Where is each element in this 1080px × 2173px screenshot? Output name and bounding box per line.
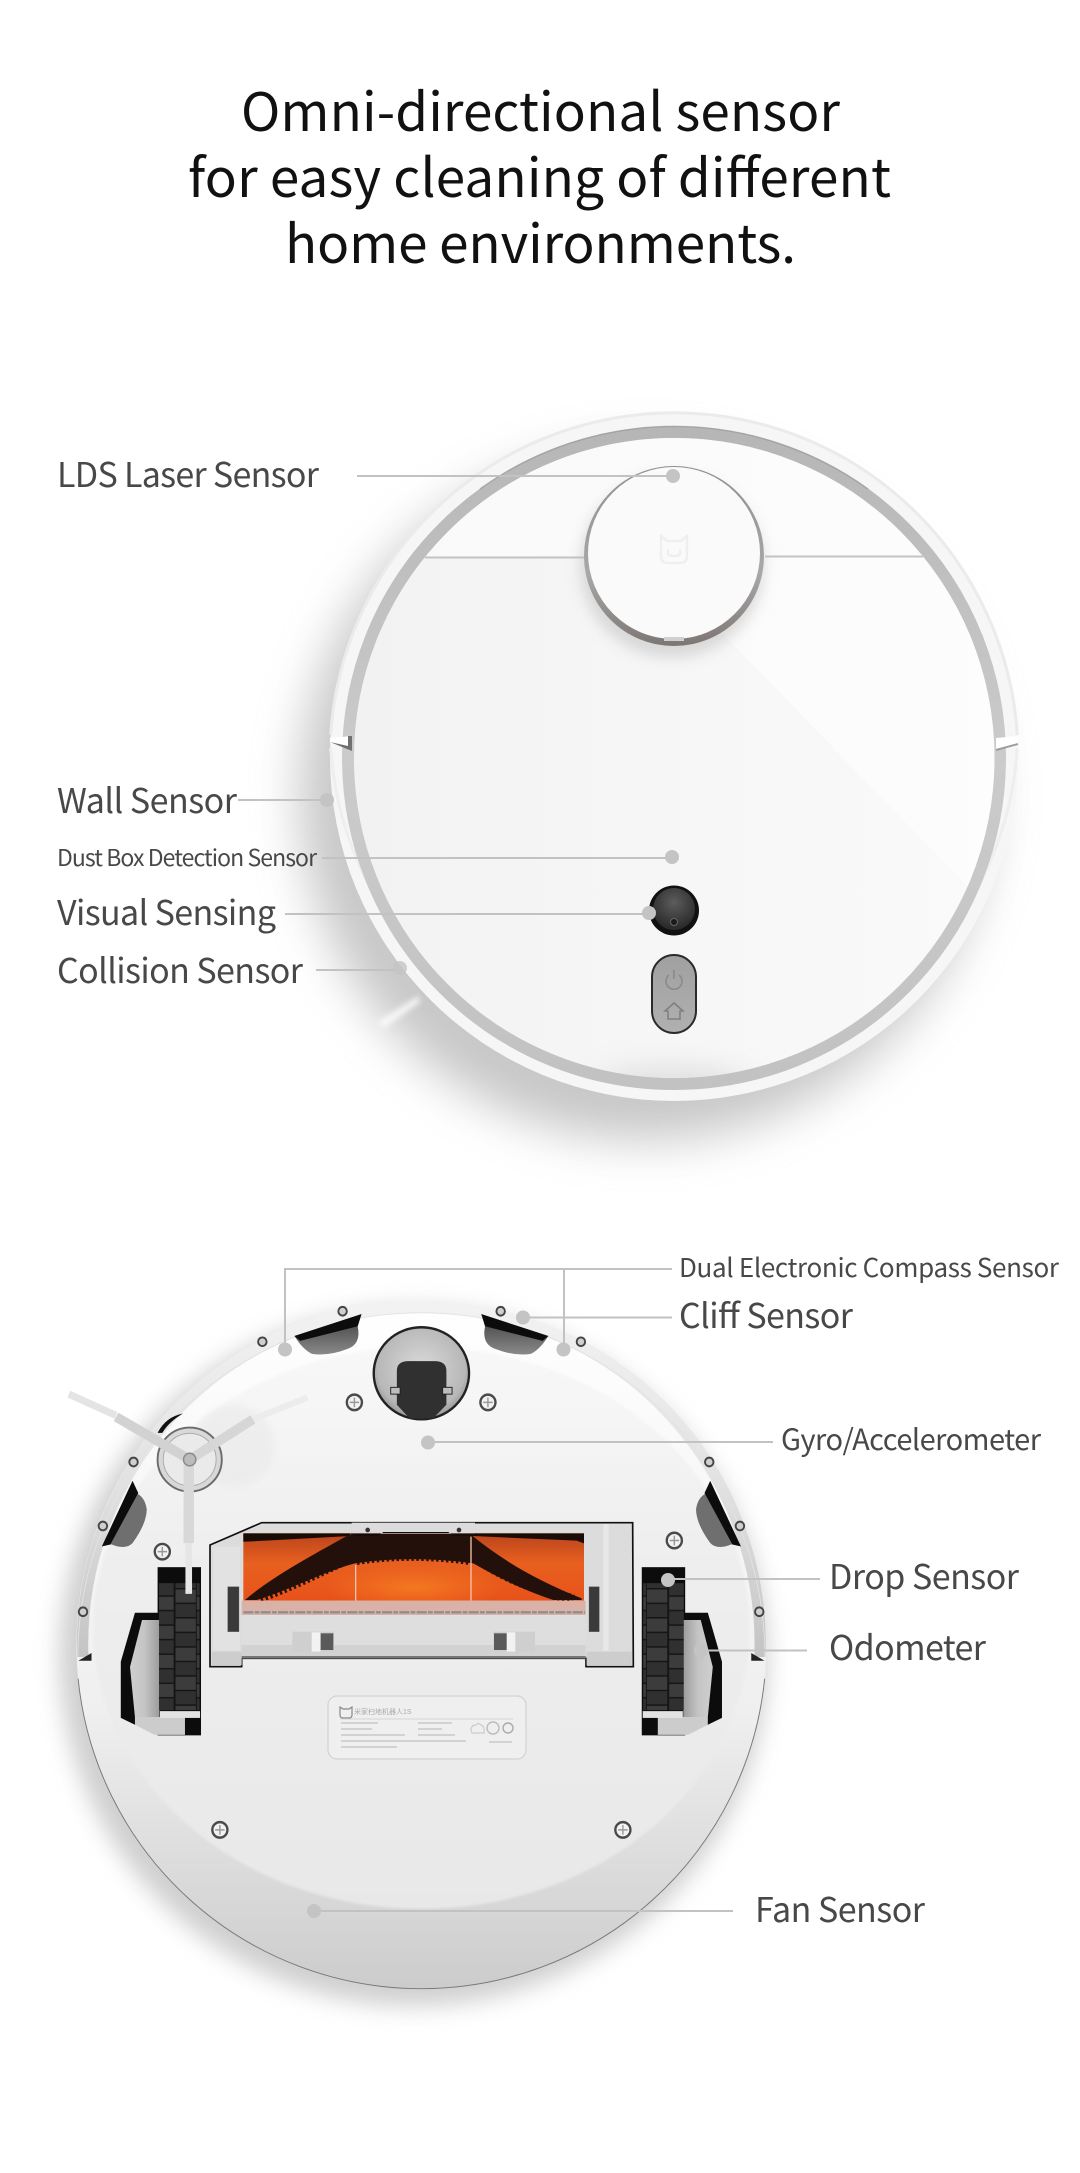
notches	[330, 736, 1018, 751]
callout: Cliff Sensor	[516, 1289, 854, 1338]
base disc	[76, 1301, 766, 1989]
power and home buttons	[652, 955, 696, 1033]
gray ring	[348, 432, 1000, 1084]
brush compartment	[210, 1523, 633, 1667]
icon: Mi logo	[661, 536, 687, 563]
nameplate: 米家扫地机器人1S	[354, 1707, 412, 1716]
clips	[292, 1632, 535, 1652]
callout: Dual Electronic Compass Sensor	[278, 1248, 1060, 1356]
front caster wheel	[373, 1326, 470, 1420]
callout: Collision Sensor: Collision Sensor	[57, 944, 304, 993]
callout: Dual Electronic Compass Sensor: Dual Electronic Compass Sensor	[679, 1248, 1060, 1285]
callout: Wall Sensor	[57, 774, 334, 823]
LDS turret	[580, 466, 764, 658]
callout: Dust Box Detection Sensor: Dust Box Detection Sensor	[57, 839, 317, 873]
robot shadow	[59, 1308, 767, 2006]
robot shadow	[300, 450, 990, 1140]
callout: Odometer: Odometer	[829, 1621, 987, 1670]
callout: Drop Sensor: Drop Sensor	[829, 1550, 1020, 1599]
cliff sensors	[102, 1314, 741, 1547]
visual sensing camera	[649, 886, 699, 936]
callout: Visual Sensing: Visual Sensing	[57, 886, 276, 935]
bottom-view robot	[59, 1301, 767, 2006]
title	[188, 71, 891, 279]
icon: home	[665, 1003, 683, 1019]
housing	[210, 1523, 633, 1667]
top-view robot	[300, 413, 1018, 1140]
side brush streak in shadow	[378, 996, 420, 1028]
callout: Gyro/Accelerometer: Gyro/Accelerometer	[781, 1417, 1042, 1459]
callout: Cliff Sensor: Cliff Sensor	[679, 1289, 854, 1338]
top plate	[550, 438, 994, 1078]
callout: Visual Sensing	[57, 886, 656, 935]
nameplate	[328, 1696, 526, 1759]
title: for easy cleaning of different	[188, 137, 891, 213]
bar	[242, 1601, 586, 1615]
outer shell	[330, 413, 1018, 1101]
side brush	[69, 1394, 307, 1594]
callout: Dust Box Detection Sensor	[57, 839, 679, 873]
inner plate	[93, 1347, 749, 1909]
rim	[83, 1306, 760, 1657]
left wheel	[121, 1567, 201, 1735]
callout: Wall Sensor: Wall Sensor	[57, 774, 238, 823]
callout: Fan Sensor	[307, 1883, 926, 1932]
callout: Fan Sensor: Fan Sensor	[755, 1883, 926, 1932]
callout: LDS Laser Sensor: LDS Laser Sensor	[57, 448, 320, 497]
title: home environments.	[285, 203, 796, 279]
title: Omni-directional sensor	[241, 71, 840, 147]
callout: Odometer	[694, 1621, 987, 1670]
callout: Gyro/Accelerometer	[421, 1417, 1042, 1459]
icon: power	[666, 970, 682, 989]
callout: Drop Sensor	[661, 1550, 1020, 1599]
plate seam	[425, 556, 923, 558]
orange window	[243, 1523, 584, 1601]
right wheel	[642, 1567, 722, 1735]
screws	[79, 1307, 764, 1838]
roller ends	[228, 1587, 239, 1632]
brush bristles	[245, 1533, 582, 1600]
callout: LDS Laser Sensor	[57, 448, 680, 497]
